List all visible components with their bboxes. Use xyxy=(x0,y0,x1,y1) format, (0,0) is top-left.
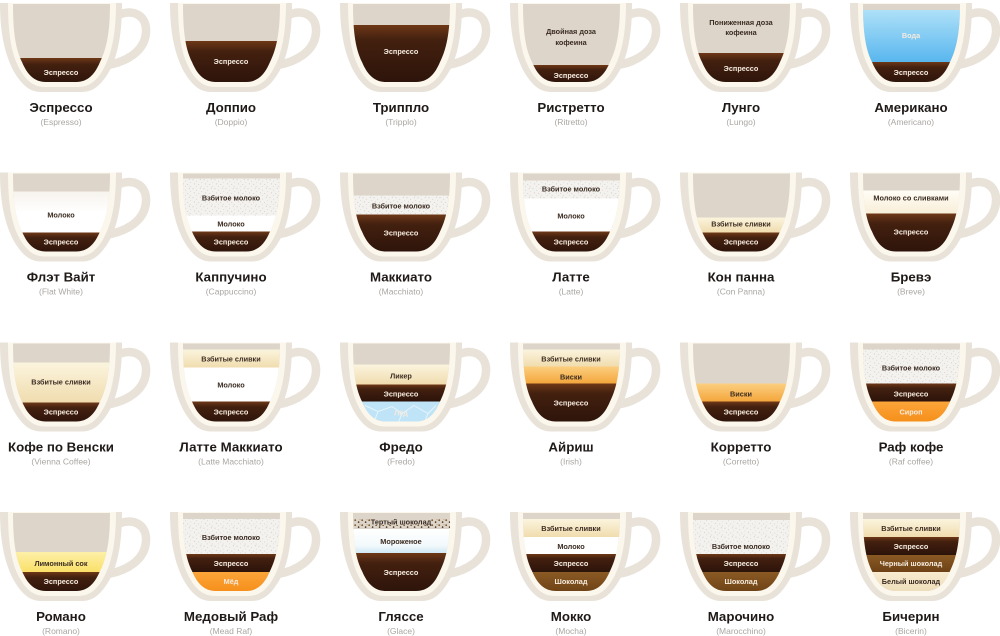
cup: Romano: Лимонный сок xyxy=(34,559,88,568)
cup: Mocha: Мокко xyxy=(551,609,591,624)
cup: Macchiato: Маккиато xyxy=(370,270,432,284)
cup: Glace: Эспрессо xyxy=(384,568,419,577)
cup: Bicerin: (Bicerin) xyxy=(895,626,927,636)
cup: Breve xyxy=(850,172,996,296)
cup: Mocha: (Mocha) xyxy=(555,626,587,636)
cup: Irish: (Irish) xyxy=(560,456,582,466)
cup: Marocchino: Марочино xyxy=(708,609,774,624)
cup: Fredo: Фредо xyxy=(379,440,423,454)
cup: Glace: Мороженое xyxy=(380,537,422,546)
cup: Cappuccino: Молоко xyxy=(217,220,245,228)
cup: Con Panna: Кон панна xyxy=(708,270,775,284)
cup: Raf coffee: (Raf coffee) xyxy=(889,456,933,466)
cup: Doppio: Доппио xyxy=(206,100,256,115)
cup: Americano xyxy=(850,3,996,127)
cup: Corretto: Виски xyxy=(730,390,752,398)
cup: Ristretto xyxy=(510,3,656,127)
cup: Mead Raf: Эспрессо xyxy=(214,559,249,568)
cup: Con Panna: Взбитые сливки xyxy=(711,220,771,228)
cup: Mead Raf: (Mead Raf) xyxy=(210,626,252,636)
cup: Latte: Латте xyxy=(552,270,590,284)
cup: Vienna Coffee: Кофе по Венски xyxy=(8,440,114,454)
cup: Irish: Айриш xyxy=(548,440,594,454)
cup: Doppio: (Doppio) xyxy=(215,117,247,127)
cup: Ristretto: (Ritretto) xyxy=(554,117,588,127)
cup: Latte Macchiato xyxy=(170,342,316,466)
cup: Corretto: (Corretto) xyxy=(723,456,759,466)
cup: Macchiato: Взбитое молоко xyxy=(372,202,431,210)
cup: Lungo: Лунго xyxy=(722,100,760,115)
cup: Latte Macchiato: Эспрессо xyxy=(214,408,249,416)
cup: Lungo: Пониженная доза xyxy=(709,18,774,27)
cup: Con Panna: (Con Panna) xyxy=(717,286,765,296)
cup: Espresso: (Espresso) xyxy=(40,117,82,127)
cup: Glace: Тертый шоколад xyxy=(371,518,432,526)
cup: Americano: Вода xyxy=(902,31,921,40)
cup: Breve: Бревэ xyxy=(891,270,931,284)
cup: Doppio: Эспрессо xyxy=(214,57,249,66)
cup: Glace: (Glace) xyxy=(387,626,415,636)
cup: Breve: Молоко со сливками xyxy=(873,194,949,202)
cup: Macchiato: (Macchiato) xyxy=(379,286,423,296)
cup: Espresso xyxy=(0,3,146,127)
cup: Tripplo: (Tripplo) xyxy=(385,117,417,127)
cup: Mocha: Эспрессо xyxy=(554,559,589,568)
cup: Latte: Молоко xyxy=(557,212,585,220)
cup: Bicerin: Эспрессо xyxy=(894,542,929,551)
cup: Latte: Взбитое молоко xyxy=(542,184,601,194)
cup: Romano: Романо xyxy=(36,609,86,624)
cup: Ristretto: Ристретто xyxy=(537,100,605,115)
cup: Flat White: Флэт Вайт xyxy=(27,270,96,284)
cup: Ristretto: Двойная доза xyxy=(546,27,597,36)
cup: Macchiato xyxy=(340,172,486,296)
cup: Mocha: Шоколад xyxy=(555,577,588,586)
cup: Breve: (Breve) xyxy=(897,286,925,296)
cup: Cappuccino: (Cappuccino) xyxy=(206,286,256,296)
cup: Raf coffee xyxy=(850,342,996,466)
cup: Cappuccino: Взбитое молоко xyxy=(202,194,261,202)
cup: Latte: (Latte) xyxy=(559,286,583,296)
cup: Latte Macchiato: (Latte Macchiato) xyxy=(198,456,264,466)
cup: Marocchino: (Marocchino) xyxy=(716,626,766,636)
cup: Breve: Эспрессо xyxy=(894,228,929,236)
cup: Lungo xyxy=(680,3,826,127)
cup: Fredo: Эспрессо xyxy=(384,390,419,398)
cup: Bicerin: Черный шоколад xyxy=(880,559,943,568)
cup: Flat White: Эспрессо xyxy=(44,238,79,246)
cup: Vienna Coffee: Эспрессо xyxy=(44,408,79,416)
cup: Bicerin: Бичерин xyxy=(882,609,940,624)
cup: Marocchino: Эспрессо xyxy=(724,559,759,568)
cup: Vienna Coffee: Взбитые сливки xyxy=(31,378,91,386)
cup: Cappuccino: Эспрессо xyxy=(214,238,249,246)
cup: Flat White: (Flat White) xyxy=(39,286,83,296)
cup: Tripplo: Эспрессо xyxy=(384,47,419,56)
cup: Fredo: Ликер xyxy=(390,372,412,380)
cup: Irish: Эспрессо xyxy=(554,398,589,408)
cup: Mead Raf: Мёд xyxy=(224,577,239,586)
cup: Fredo xyxy=(340,342,486,466)
cup: Glace: Гляссе xyxy=(378,609,424,624)
cup: Mead Raf: Медовый Раф xyxy=(184,609,278,624)
cup: Bicerin: Белый шоколад xyxy=(882,577,941,586)
cup: Corretto xyxy=(680,342,826,466)
cup: Irish: Взбитые сливки xyxy=(541,354,601,364)
cup: Bicerin xyxy=(850,512,996,636)
cup: Macchiato: Эспрессо xyxy=(384,228,419,238)
cup: Romano xyxy=(0,512,146,636)
cup: Fredo: Лёд xyxy=(394,408,408,418)
cup: Latte Macchiato: Взбитые сливки xyxy=(201,354,261,364)
cup: Bicerin: Взбитые сливки xyxy=(881,524,941,533)
cup: Irish: Виски xyxy=(560,372,582,382)
cup: Irish xyxy=(510,342,656,466)
cup: Mead Raf: Взбитое молоко xyxy=(202,533,261,542)
cup: Flat White xyxy=(0,172,146,296)
cup: Lungo: Эспрессо xyxy=(724,64,759,73)
cup: Glace xyxy=(340,512,486,636)
cup: Marocchino xyxy=(680,512,826,636)
cup: Latte Macchiato: Молоко xyxy=(217,380,245,390)
cup: Cappuccino: Каппучино xyxy=(195,270,267,284)
cup: Americano: Эспрессо xyxy=(894,68,929,77)
cup: Con Panna: Эспрессо xyxy=(724,238,759,246)
cup: Mocha: Взбитые сливки xyxy=(541,524,601,533)
cup: Tripplo: Триппло xyxy=(373,100,429,115)
cup: Raf coffee: Эспрессо xyxy=(894,390,929,398)
cup: Flat White: Молоко xyxy=(47,210,75,220)
cup: Lungo: (Lungo) xyxy=(726,117,756,127)
cup: Mocha xyxy=(510,512,656,636)
cup: Vienna Coffee: (Vienna Coffee) xyxy=(31,456,91,466)
cup: Lungo: кофеина xyxy=(725,28,758,37)
cup: Latte Macchiato: Латте Маккиато xyxy=(179,440,283,454)
cup: Corretto: Эспрессо xyxy=(724,408,759,416)
cup: Latte xyxy=(510,172,656,296)
cup: Fredo: (Fredo) xyxy=(387,456,415,466)
cup: Cappuccino xyxy=(170,172,316,296)
cup: Raf coffee: Взбитое молоко xyxy=(882,364,941,372)
cup: Romano: (Romano) xyxy=(42,626,80,636)
cup: Americano: (Americano) xyxy=(888,117,934,127)
cup: Ristretto: Эспрессо xyxy=(554,71,589,80)
cup: Ristretto: кофеина xyxy=(555,38,588,47)
cup: Raf coffee: Раф кофе xyxy=(879,440,943,454)
cup: Espresso: Эспрессо xyxy=(29,100,93,115)
cup: Doppio xyxy=(170,3,316,127)
cup: Corretto: Корретто xyxy=(711,440,771,454)
cup: Romano: Эспрессо xyxy=(44,577,79,586)
cup: Espresso: Эспрессо xyxy=(44,68,79,77)
cup: Mead Raf xyxy=(170,512,316,636)
cup: Vienna Coffee xyxy=(0,342,146,466)
cup: Marocchino: Шоколад xyxy=(725,577,758,586)
cup: Tripplo xyxy=(340,3,486,127)
cup: Con Panna xyxy=(680,172,826,296)
cup: Americano: Американо xyxy=(874,100,948,115)
cup: Mocha: Молоко xyxy=(557,542,585,551)
cup: Marocchino: Взбитое молоко xyxy=(712,542,771,551)
cup: Latte: Эспрессо xyxy=(554,238,589,246)
cup: Raf coffee: Сироп xyxy=(899,408,923,416)
